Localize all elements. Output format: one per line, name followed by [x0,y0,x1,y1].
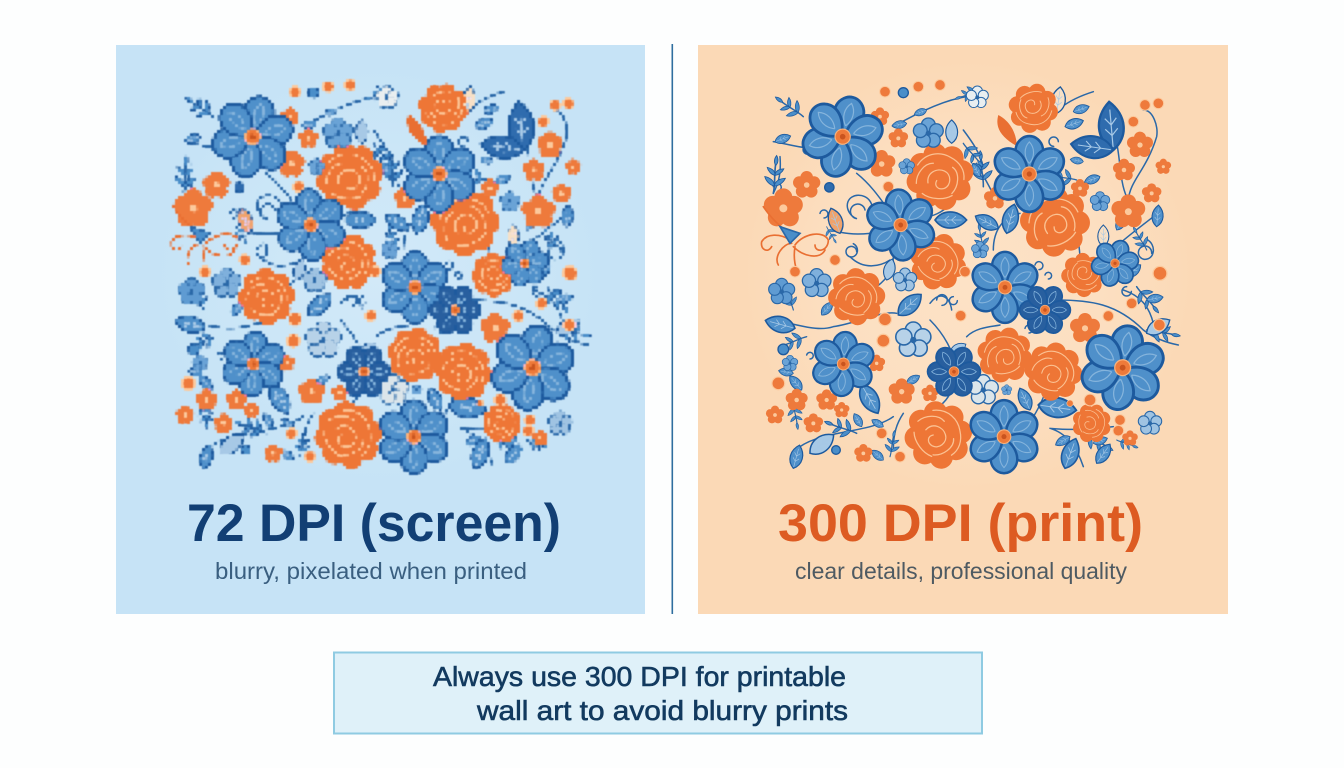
small leaf sprigs [763,83,1182,459]
orange accent leaf [997,115,1017,146]
heading: 300 DPI: 300 DPI (print) [778,494,1143,553]
leaves [763,86,1173,471]
berries and buds [772,80,1167,462]
stems and swirls [770,92,1178,467]
small orange blossoms [764,107,1171,462]
caption: clear: clear details, professional quality [795,558,1127,584]
blue flowers [791,86,1174,473]
callout: recommendation: Always use 300 DPI for printable [433,661,846,692]
panel: 72 DPI screen [116,45,645,614]
panel: 300 DPI print [698,45,1228,614]
callout: recommendation: wall art to avoid blurry prints [476,695,848,726]
pale and blue blossoms [769,86,1162,434]
orange roses [822,81,1110,479]
caption: blurry: blurry, pixelated when printed [215,558,527,584]
heading: 72 DPI: 72 DPI (screen) [187,494,561,553]
floral pattern: pixelated [171,80,592,479]
phoenix flourish [761,207,828,270]
divider line [672,44,673,614]
callout: recommendation [334,652,982,734]
floral pattern: sharp [761,80,1182,479]
